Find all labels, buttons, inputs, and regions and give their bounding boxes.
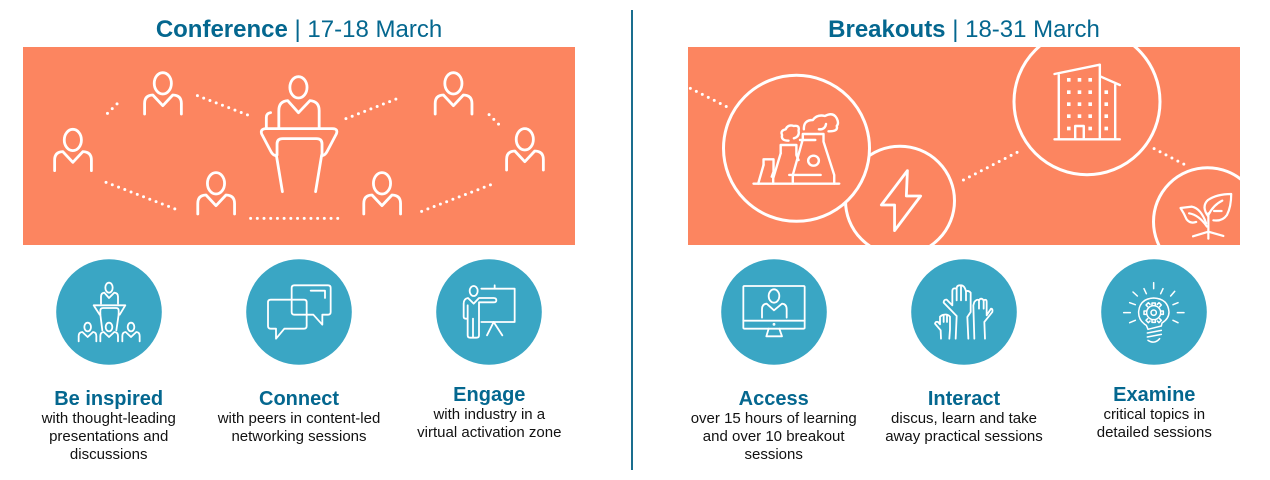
description: discussions — [70, 446, 147, 463]
description: virtual activation zone — [417, 424, 561, 441]
heading: Interact — [928, 388, 1000, 410]
description — [1097, 406, 1212, 441]
icon: factory cooling towers — [754, 114, 839, 184]
heading: Be inspired — [54, 388, 163, 410]
description: with thought-leading — [42, 410, 176, 427]
description: detailed sessions — [1097, 424, 1212, 441]
column: Interact — [885, 259, 1043, 445]
description: networking sessions — [231, 428, 367, 445]
circle: energy — [846, 146, 954, 255]
title: Breakouts: Breakouts | 18-31 March — [828, 16, 1100, 43]
icon: video on monitor — [721, 259, 827, 365]
description: over 15 hours of learning — [691, 410, 857, 427]
description: and over 10 breakout — [703, 428, 845, 445]
panel: breakouts sector illustration — [688, 47, 1240, 245]
column: Examine — [1097, 259, 1212, 441]
description — [417, 406, 561, 441]
icon: attendee top left — [145, 73, 181, 114]
description — [691, 410, 857, 463]
description: with industry in a — [433, 406, 545, 423]
heading: Access — [739, 388, 809, 410]
vertical divider — [631, 10, 633, 470]
description — [218, 410, 380, 445]
circle: industry — [724, 75, 870, 221]
icon: raised hands — [911, 259, 1017, 365]
description: presentations and — [49, 428, 168, 445]
icon: speech bubbles — [246, 259, 352, 365]
heading: Examine — [1113, 384, 1195, 406]
icon: light bulb with gear — [1101, 259, 1207, 365]
icon: lightning bolt — [881, 171, 921, 231]
heading: Connect — [259, 388, 339, 410]
column: Be inspired — [42, 259, 176, 463]
description: away practical sessions — [885, 428, 1043, 445]
icon: presenter at board — [436, 259, 542, 365]
dotted connectors — [690, 88, 1184, 180]
column: Engage — [417, 259, 561, 441]
icon: attendee bottom left — [198, 173, 235, 214]
circle: buildings — [1014, 29, 1160, 175]
dotted connectors — [106, 96, 502, 218]
icon: attendee far right — [507, 129, 543, 170]
column: Connect — [218, 259, 380, 445]
icon: office building — [1054, 65, 1120, 139]
description: sessions — [744, 446, 803, 463]
icon: attendee top right — [435, 73, 472, 114]
description: with peers in content-led — [218, 410, 380, 427]
icon: speaker and audience — [56, 259, 162, 365]
title: Conference: Conference | 17-18 March — [156, 16, 442, 43]
description — [42, 410, 176, 463]
icon: attendee bottom right — [364, 173, 401, 214]
column: Access — [691, 259, 857, 463]
icon: speaker at podium — [261, 77, 337, 192]
description: critical topics in — [1103, 406, 1205, 423]
icon: attendee far left — [55, 129, 91, 171]
description: discus, learn and take — [891, 410, 1037, 427]
circle: nature — [1152, 166, 1240, 245]
description — [885, 410, 1043, 445]
heading: Engage — [453, 384, 525, 406]
icon: plant sprout — [1181, 194, 1231, 239]
